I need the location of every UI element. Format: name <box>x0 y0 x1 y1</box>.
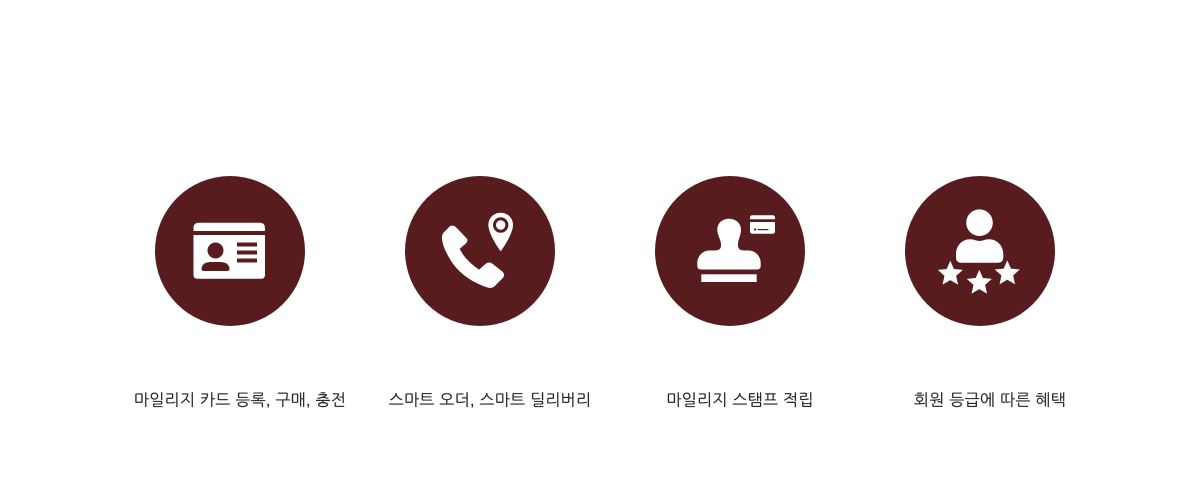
label: smart order: 스마트 오더, 스마트 딜리버리 <box>389 392 591 410</box>
item: mileage card <box>134 176 346 410</box>
label: mileage card: 마일리지 카드 등록, 구매, 충전 <box>134 392 346 410</box>
label: member benefits: 회원 등급에 따른 혜택 <box>914 392 1066 410</box>
icon: stamp and card <box>655 176 805 326</box>
item: mileage stamp <box>655 176 814 410</box>
label: mileage stamp: 마일리지 스탬프 적립 <box>666 392 814 410</box>
icon: phone and location pin <box>405 176 555 326</box>
item: smart order <box>389 176 591 410</box>
icon: member with stars <box>905 176 1055 326</box>
icon: membership card <box>155 176 305 326</box>
item: member benefits <box>905 176 1066 410</box>
